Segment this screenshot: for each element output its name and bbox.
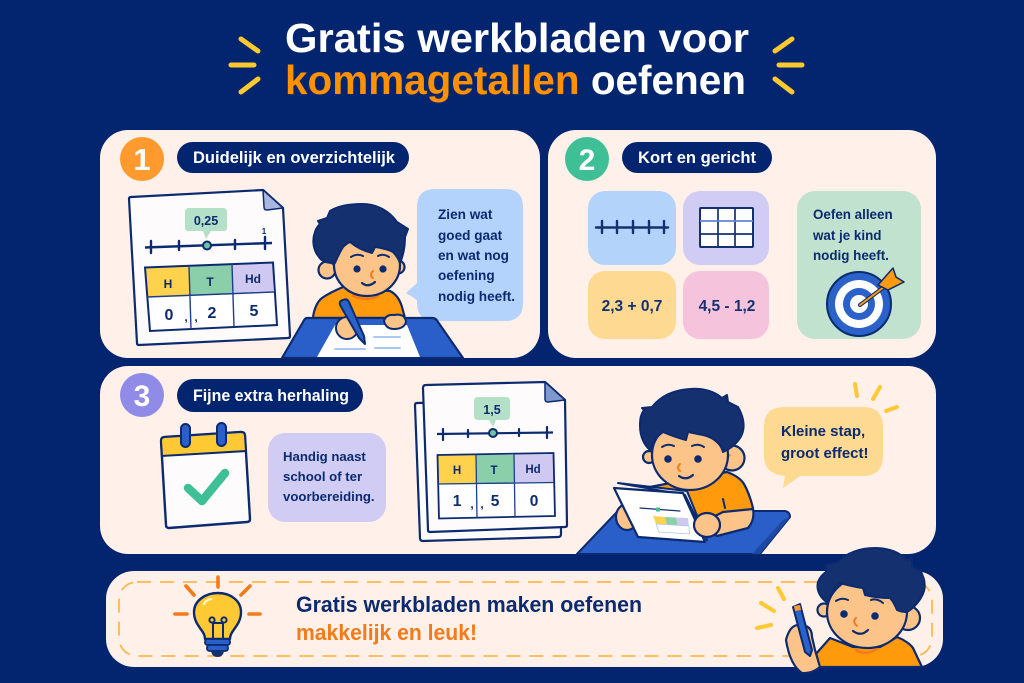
speech bubble: zien wat goed gaat [406, 189, 523, 321]
icon: target with arrow [827, 268, 904, 336]
worksheet stack 1,5 [415, 382, 567, 541]
place value table 0,25: 2 [208, 305, 217, 322]
place value table 1,5: 0 [530, 493, 538, 510]
worksheet 0,25 [129, 190, 290, 345]
panel 1: duidelijk en overzichtelijk [100, 130, 540, 358]
tile: 2,3 + 0,7: 2,3 + 0,7 [602, 298, 662, 315]
speech bubble: kleine stap: Kleine stap, [781, 423, 865, 440]
badge 2: 2 [579, 144, 595, 177]
callout: handig naast school [268, 433, 386, 522]
heading pill 2: Kort en gericht [638, 149, 756, 167]
banner: conclusion [106, 548, 943, 673]
title: Gratis werkbladen voor [285, 15, 749, 61]
banner text: Gratis werkbladen maken oefenen [296, 592, 642, 617]
illustration: boy writing at desk [282, 204, 463, 358]
place value table 1,5: H [453, 465, 461, 477]
tile: number line [588, 191, 676, 265]
speech bubble: kleine stap [764, 407, 883, 488]
title: kommagetallen oefenen [285, 57, 746, 103]
banner text [296, 592, 642, 645]
callout: oefen alleen: wat je kind [812, 228, 881, 243]
callout: oefen alleen: nodig heeft. [813, 248, 889, 263]
place value table 0,25 [145, 262, 277, 331]
number line 1,5: 1,5 [483, 403, 501, 417]
panel 3: fijne extra herhaling [100, 366, 936, 554]
badge 2 [565, 137, 609, 181]
place value table 0,25: T [206, 275, 214, 289]
tile: 4,5 - 1,2: 4,5 - 1,2 [699, 298, 755, 315]
place value table 0,25: , [194, 310, 198, 324]
number line 0,25 [145, 208, 272, 253]
speech bubble: zien wat goed gaat: goed gaat [438, 228, 503, 243]
callout: oefen alleen [797, 191, 921, 339]
speech bubble: zien wat goed gaat: en wat nog [438, 248, 509, 263]
place value table 0,25: H [164, 277, 172, 291]
callout: handig naast school: Handig naast [283, 449, 366, 464]
place value table 0,25: Hd [245, 272, 261, 286]
illustration: boy with pencil [786, 548, 925, 673]
tile: 4,5 - 1,2 [683, 271, 769, 339]
icon: title sparks right [775, 39, 802, 92]
speech bubble: zien wat goed gaat: oefening [438, 268, 495, 283]
place value table 1,5: T [490, 465, 498, 477]
illustration: boy reading worksheet [577, 389, 790, 554]
banner text: makkelijk en leuk! [296, 620, 477, 645]
heading pill 3 [177, 379, 363, 412]
icon: calendar with check [161, 423, 250, 528]
tile: table grid [683, 191, 769, 265]
callout: handig naast school: voorbereiding. [283, 489, 375, 504]
heading pill 3: Fijne extra herhaling [193, 387, 349, 405]
place value table 1,5 [438, 453, 555, 518]
heading pill 1 [177, 142, 409, 173]
number line 0,25: 1 [262, 227, 267, 236]
place value table 0,25: 5 [250, 303, 259, 320]
icon: sparks by bubble [855, 384, 897, 411]
panel 2: kort en gericht [548, 130, 936, 358]
badge 3 [120, 373, 164, 417]
heading pill 1: Duidelijk en overzichtelijk [193, 149, 396, 167]
icon: sparks by boy [757, 588, 784, 628]
speech bubble: zien wat goed gaat: Zien wat [438, 207, 493, 222]
speech bubble: kleine stap: groot effect! [781, 445, 868, 462]
place value table 1,5: , [470, 497, 474, 511]
badge 1 [120, 137, 164, 181]
badge 3: 3 [134, 380, 150, 413]
title [285, 15, 749, 103]
place value table 1,5: 1 [453, 493, 462, 510]
icon: light bulb [175, 577, 260, 657]
heading pill 2 [622, 142, 772, 173]
icon: title sparks left [231, 39, 258, 92]
callout: handig naast school: school of ter [283, 469, 362, 484]
badge 1: 1 [133, 142, 151, 177]
place value table 0,25: 0 [165, 307, 174, 324]
callout: oefen alleen: Oefen alleen [813, 207, 893, 222]
number line 0,25: 0,25 [194, 214, 218, 228]
speech bubble: zien wat goed gaat: nodig heeft. [438, 289, 515, 304]
place value table 0,25: , [184, 310, 188, 324]
place value table 1,5: Hd [525, 464, 541, 476]
tile: 2,3 + 0,7 [588, 271, 676, 339]
number line 1,5 [437, 397, 553, 440]
place value table 1,5: , [480, 497, 484, 511]
place value table 1,5: 5 [491, 493, 500, 510]
